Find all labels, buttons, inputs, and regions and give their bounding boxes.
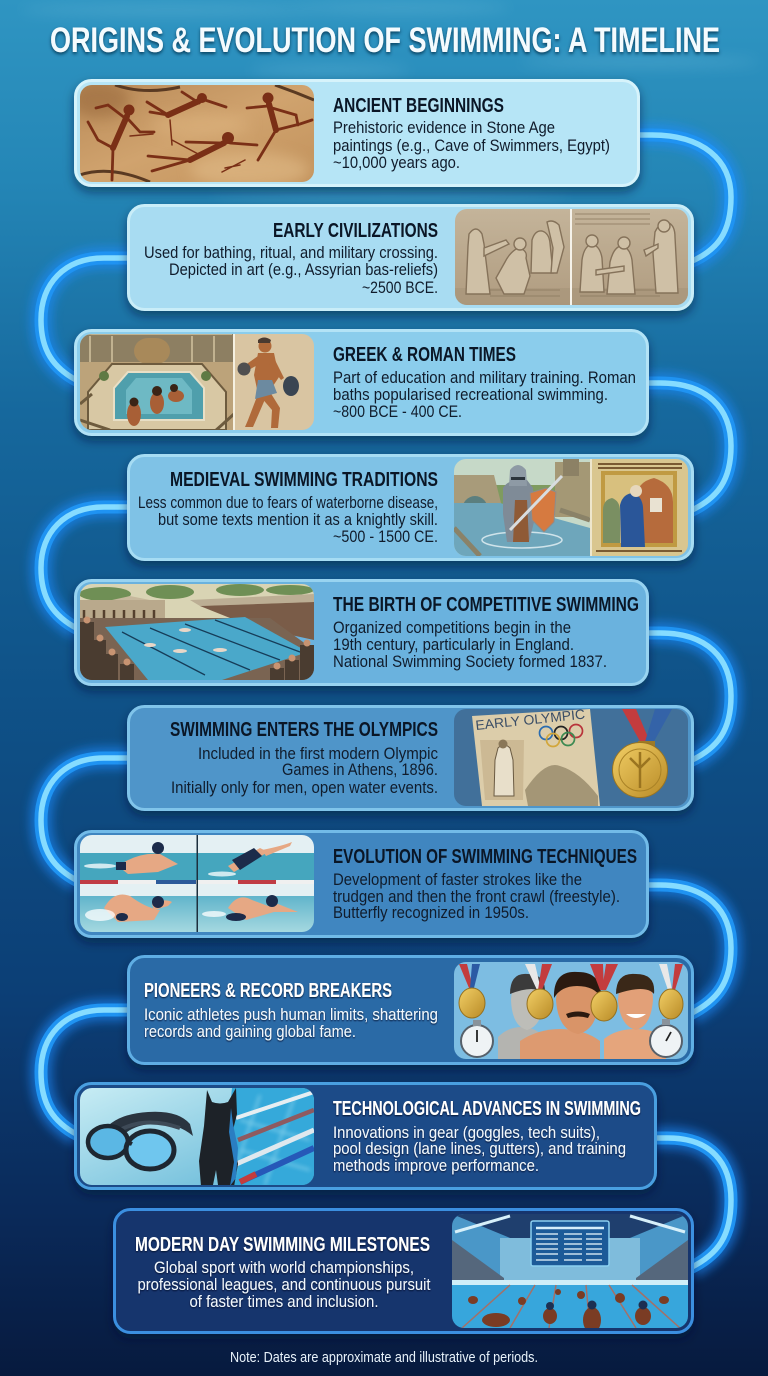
panel: medieval swimming traditions (128, 456, 692, 560)
heading: TECHNOLOGICAL ADVANCES IN SWIMMING (333, 1098, 641, 1120)
description: Prehistoric evidence in Stone Age (333, 118, 555, 137)
description: pool design (lane lines, gutters), and training (333, 1139, 626, 1158)
description: Games in Athens, 1896. (282, 760, 438, 779)
description: Part of education and military training. Roman (333, 368, 636, 387)
image: four swimming strokes (80, 835, 314, 932)
image: early olympic poster and gold medal (454, 707, 688, 806)
panel: modern day swimming milestones (114, 1210, 692, 1333)
panel: pioneers and record breakers (128, 956, 692, 1064)
description: ~2500 BCE. (362, 278, 438, 297)
panel: ancient beginnings (70, 80, 638, 188)
description: National Swimming Society formed 1837. (333, 652, 607, 671)
description: ~800 BCE - 400 CE. (333, 402, 462, 421)
description: ~10,000 years ago. (333, 153, 460, 172)
connector: medieval to competitive (41, 507, 131, 629)
heading: PIONEERS & RECORD BREAKERS (144, 980, 392, 1002)
description (138, 1258, 431, 1311)
panel: birth of competitive swimming (76, 580, 648, 684)
panel: early civilizations (128, 206, 692, 310)
description (333, 870, 620, 922)
image: cave painting of swimmers (80, 85, 314, 182)
connector: techniques to pioneers (645, 885, 731, 1014)
connector: competitive to olympics (645, 633, 731, 761)
description: Global sport with world championships, (154, 1258, 414, 1277)
description: Innovations in gear (goggles, tech suits), (333, 1123, 600, 1142)
description: paintings (e.g., Cave of Swimmers, Egypt) (333, 136, 610, 155)
panel: greek and roman times (76, 330, 648, 434)
heading: GREEK & ROMAN TIMES (333, 344, 516, 366)
description (144, 243, 438, 297)
connector: technology to modern day (653, 1138, 731, 1268)
heading: EVOLUTION OF SWIMMING TECHNIQUES (333, 846, 637, 868)
description (333, 368, 636, 421)
panel: evolution of swimming techniques (76, 832, 648, 936)
image: 19th century swimming pool with crowd (79, 584, 314, 680)
description (333, 618, 607, 671)
heading: ANCIENT BEGINNINGS (333, 95, 504, 117)
description: Included in the first modern Olympic (198, 744, 438, 763)
heading: MODERN DAY SWIMMING MILESTONES (135, 1234, 430, 1256)
panel: swimming enters the olympics (128, 706, 692, 810)
connector: olympics to techniques (41, 758, 131, 881)
description: Initially only for men, open water events. (171, 778, 438, 797)
description: baths popularised recreational swimming. (333, 385, 608, 404)
connector: early civilizations to greek and roman (41, 258, 131, 381)
heading: THE BIRTH OF COMPETITIVE SWIMMING (333, 594, 639, 616)
description: Organized competitions begin in the (333, 618, 571, 637)
description (138, 493, 438, 546)
heading: MEDIEVAL SWIMMING TRADITIONS (170, 469, 438, 491)
image: modern arena with scoreboard (452, 1214, 688, 1333)
image: goggles, tech suit and lane lines (80, 1088, 314, 1185)
panel: technological advances (76, 1084, 656, 1202)
description: professional leagues, and continuous pursuit (138, 1275, 431, 1294)
image: knight in moat and manuscript (454, 456, 688, 556)
image: roman bath mosaic and greek athlete (80, 334, 314, 432)
heading: EARLY CIVILIZATIONS (273, 220, 438, 242)
footnote: Note: Dates are approximate and illustrative of periods. (230, 1349, 538, 1366)
description: Used for bathing, ritual, and military crossing. (144, 243, 438, 262)
image: bas-relief carvings (455, 209, 688, 305)
description: ~500 - 1500 CE. (333, 527, 438, 546)
description (171, 744, 438, 797)
description: 19th century, particularly in England. (333, 635, 574, 654)
background: surface light ripples (20, 3, 760, 200)
description: Less common due to fears of waterborne disease, (138, 493, 438, 512)
description: methods improve performance. (333, 1156, 539, 1175)
image: early olympic poster and gold medal: EARLY OLYMPIC (475, 707, 586, 733)
description: Development of faster strokes like the (333, 870, 582, 889)
description: of faster times and inclusion. (190, 1292, 378, 1311)
connector: ancient to early civilizations (636, 135, 731, 262)
description: Iconic athletes push human limits, shattering (144, 1005, 438, 1024)
image: record-breaking swimmers with medals (454, 962, 688, 1059)
connector: greek and roman to medieval (645, 383, 731, 511)
description (333, 1123, 626, 1175)
description (333, 118, 610, 172)
connector: pioneers to technology (41, 1010, 131, 1135)
description (144, 1005, 438, 1041)
description: records and gaining global fame. (144, 1022, 356, 1041)
description: trudgen and then the front crawl (freestyle). (333, 887, 620, 906)
heading: SWIMMING ENTERS THE OLYMPICS (170, 719, 438, 741)
description: Depicted in art (e.g., Assyrian bas-reliefs) (169, 260, 438, 279)
description: but some texts mention it as a knightly skill. (158, 510, 438, 529)
description: Butterfly recognized in 1950s. (333, 903, 529, 922)
